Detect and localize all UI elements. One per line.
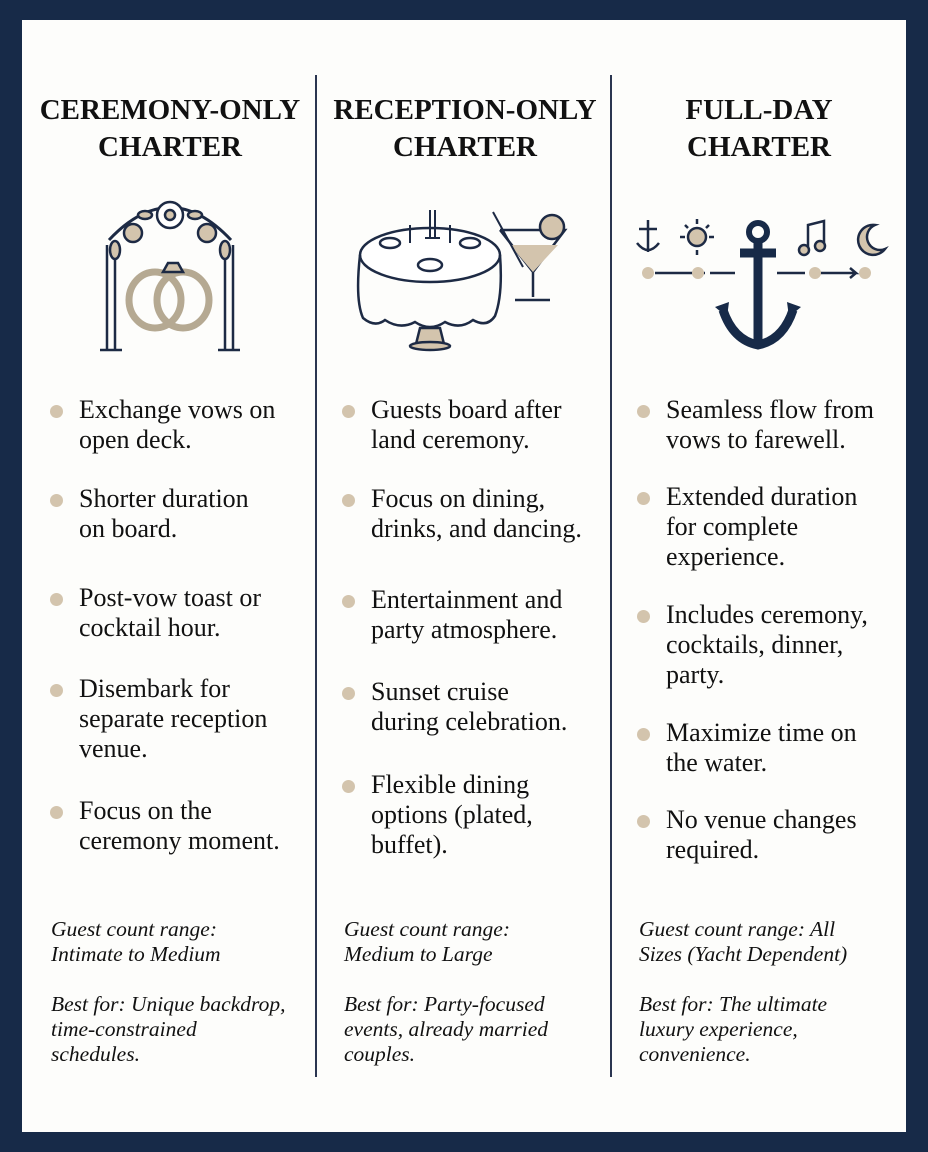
- text: for complete: [666, 512, 798, 541]
- text: open deck.: [79, 425, 192, 454]
- heading: full-day: CHARTER: [687, 131, 831, 163]
- text: buffet).: [371, 830, 448, 859]
- text: cocktail hour.: [79, 613, 221, 642]
- column 1 bullets: [50, 395, 280, 855]
- footnote col 3: Best for: The ultimate: [639, 992, 827, 1016]
- heading: reception-only: CHARTER: [393, 131, 537, 163]
- footnote col 2: events, already married: [344, 1017, 548, 1041]
- text: separate reception: [79, 704, 267, 733]
- text: Seamless flow from: [666, 395, 874, 424]
- text: ceremony moment.: [79, 826, 280, 855]
- icon: arch with rings: [100, 200, 240, 352]
- text: required.: [666, 835, 759, 864]
- heading: reception-only: RECEPTION-ONLY: [333, 94, 597, 126]
- text: Flexible dining: [371, 770, 529, 799]
- text: party atmosphere.: [371, 615, 557, 644]
- text: Sunset cruise: [371, 677, 509, 706]
- text: No venue changes: [666, 805, 857, 834]
- text: Shorter duration: [79, 484, 249, 513]
- footnote col 1: Intimate to Medium: [51, 942, 221, 966]
- text: the water.: [666, 748, 767, 777]
- text: options (plated,: [371, 800, 533, 829]
- text: Entertainment and: [371, 585, 562, 614]
- text: venue.: [79, 734, 148, 763]
- text: drinks, and dancing.: [371, 514, 582, 543]
- text: party.: [666, 660, 724, 689]
- text: Focus on the: [79, 796, 212, 825]
- footnote col 2: couples.: [344, 1042, 415, 1066]
- footnote col 2: Guest count range:: [344, 917, 510, 941]
- text: Exchange vows on: [79, 395, 275, 424]
- text: Focus on dining,: [371, 484, 545, 513]
- footnote col 2: Medium to Large: [344, 942, 492, 966]
- column 2 bullets: [342, 395, 582, 859]
- footnote col 3: Guest count range: All: [639, 917, 835, 941]
- footnote col 3: luxury experience,: [639, 1017, 798, 1041]
- footnote col 3: Sizes (Yacht Dependent): [639, 942, 847, 966]
- text: Disembark for: [79, 674, 230, 703]
- heading: reception-only: [333, 94, 597, 163]
- footnote col 1: Guest count range:: [51, 917, 217, 941]
- text: vows to farewell.: [666, 425, 846, 454]
- text: experience.: [666, 542, 785, 571]
- footnote col 3: convenience.: [639, 1042, 751, 1066]
- text: during celebration.: [371, 707, 567, 736]
- footnote col 3: [639, 917, 847, 1066]
- heading: ceremony-only: CEREMONY-ONLY: [40, 94, 300, 126]
- column 3 bullets: [637, 395, 874, 864]
- footnote col 2: Best for: Party-focused: [344, 992, 545, 1016]
- text: cocktails, dinner,: [666, 630, 843, 659]
- text: Post-vow toast or: [79, 583, 261, 612]
- footnote col 1: schedules.: [51, 1042, 140, 1066]
- text: land ceremony.: [371, 425, 530, 454]
- heading: ceremony-only: CHARTER: [98, 131, 242, 163]
- text: Extended duration: [666, 482, 857, 511]
- icon: dining table and cocktail: [356, 210, 568, 352]
- heading: ceremony-only: [40, 94, 300, 163]
- text: Guests board after: [371, 395, 562, 424]
- icon: anchor timeline: [636, 219, 889, 350]
- footnote col 1: time-constrained: [51, 1017, 197, 1041]
- footnote col 1: Best for: Unique backdrop,: [51, 992, 285, 1016]
- text: Includes ceremony,: [666, 600, 868, 629]
- heading: full-day: [685, 94, 833, 163]
- text: Maximize time on: [666, 718, 857, 747]
- text: on board.: [79, 514, 177, 543]
- heading: full-day: FULL-DAY: [685, 94, 833, 126]
- footnote col 2: [344, 917, 548, 1066]
- footnote col 1: [50, 917, 285, 1066]
